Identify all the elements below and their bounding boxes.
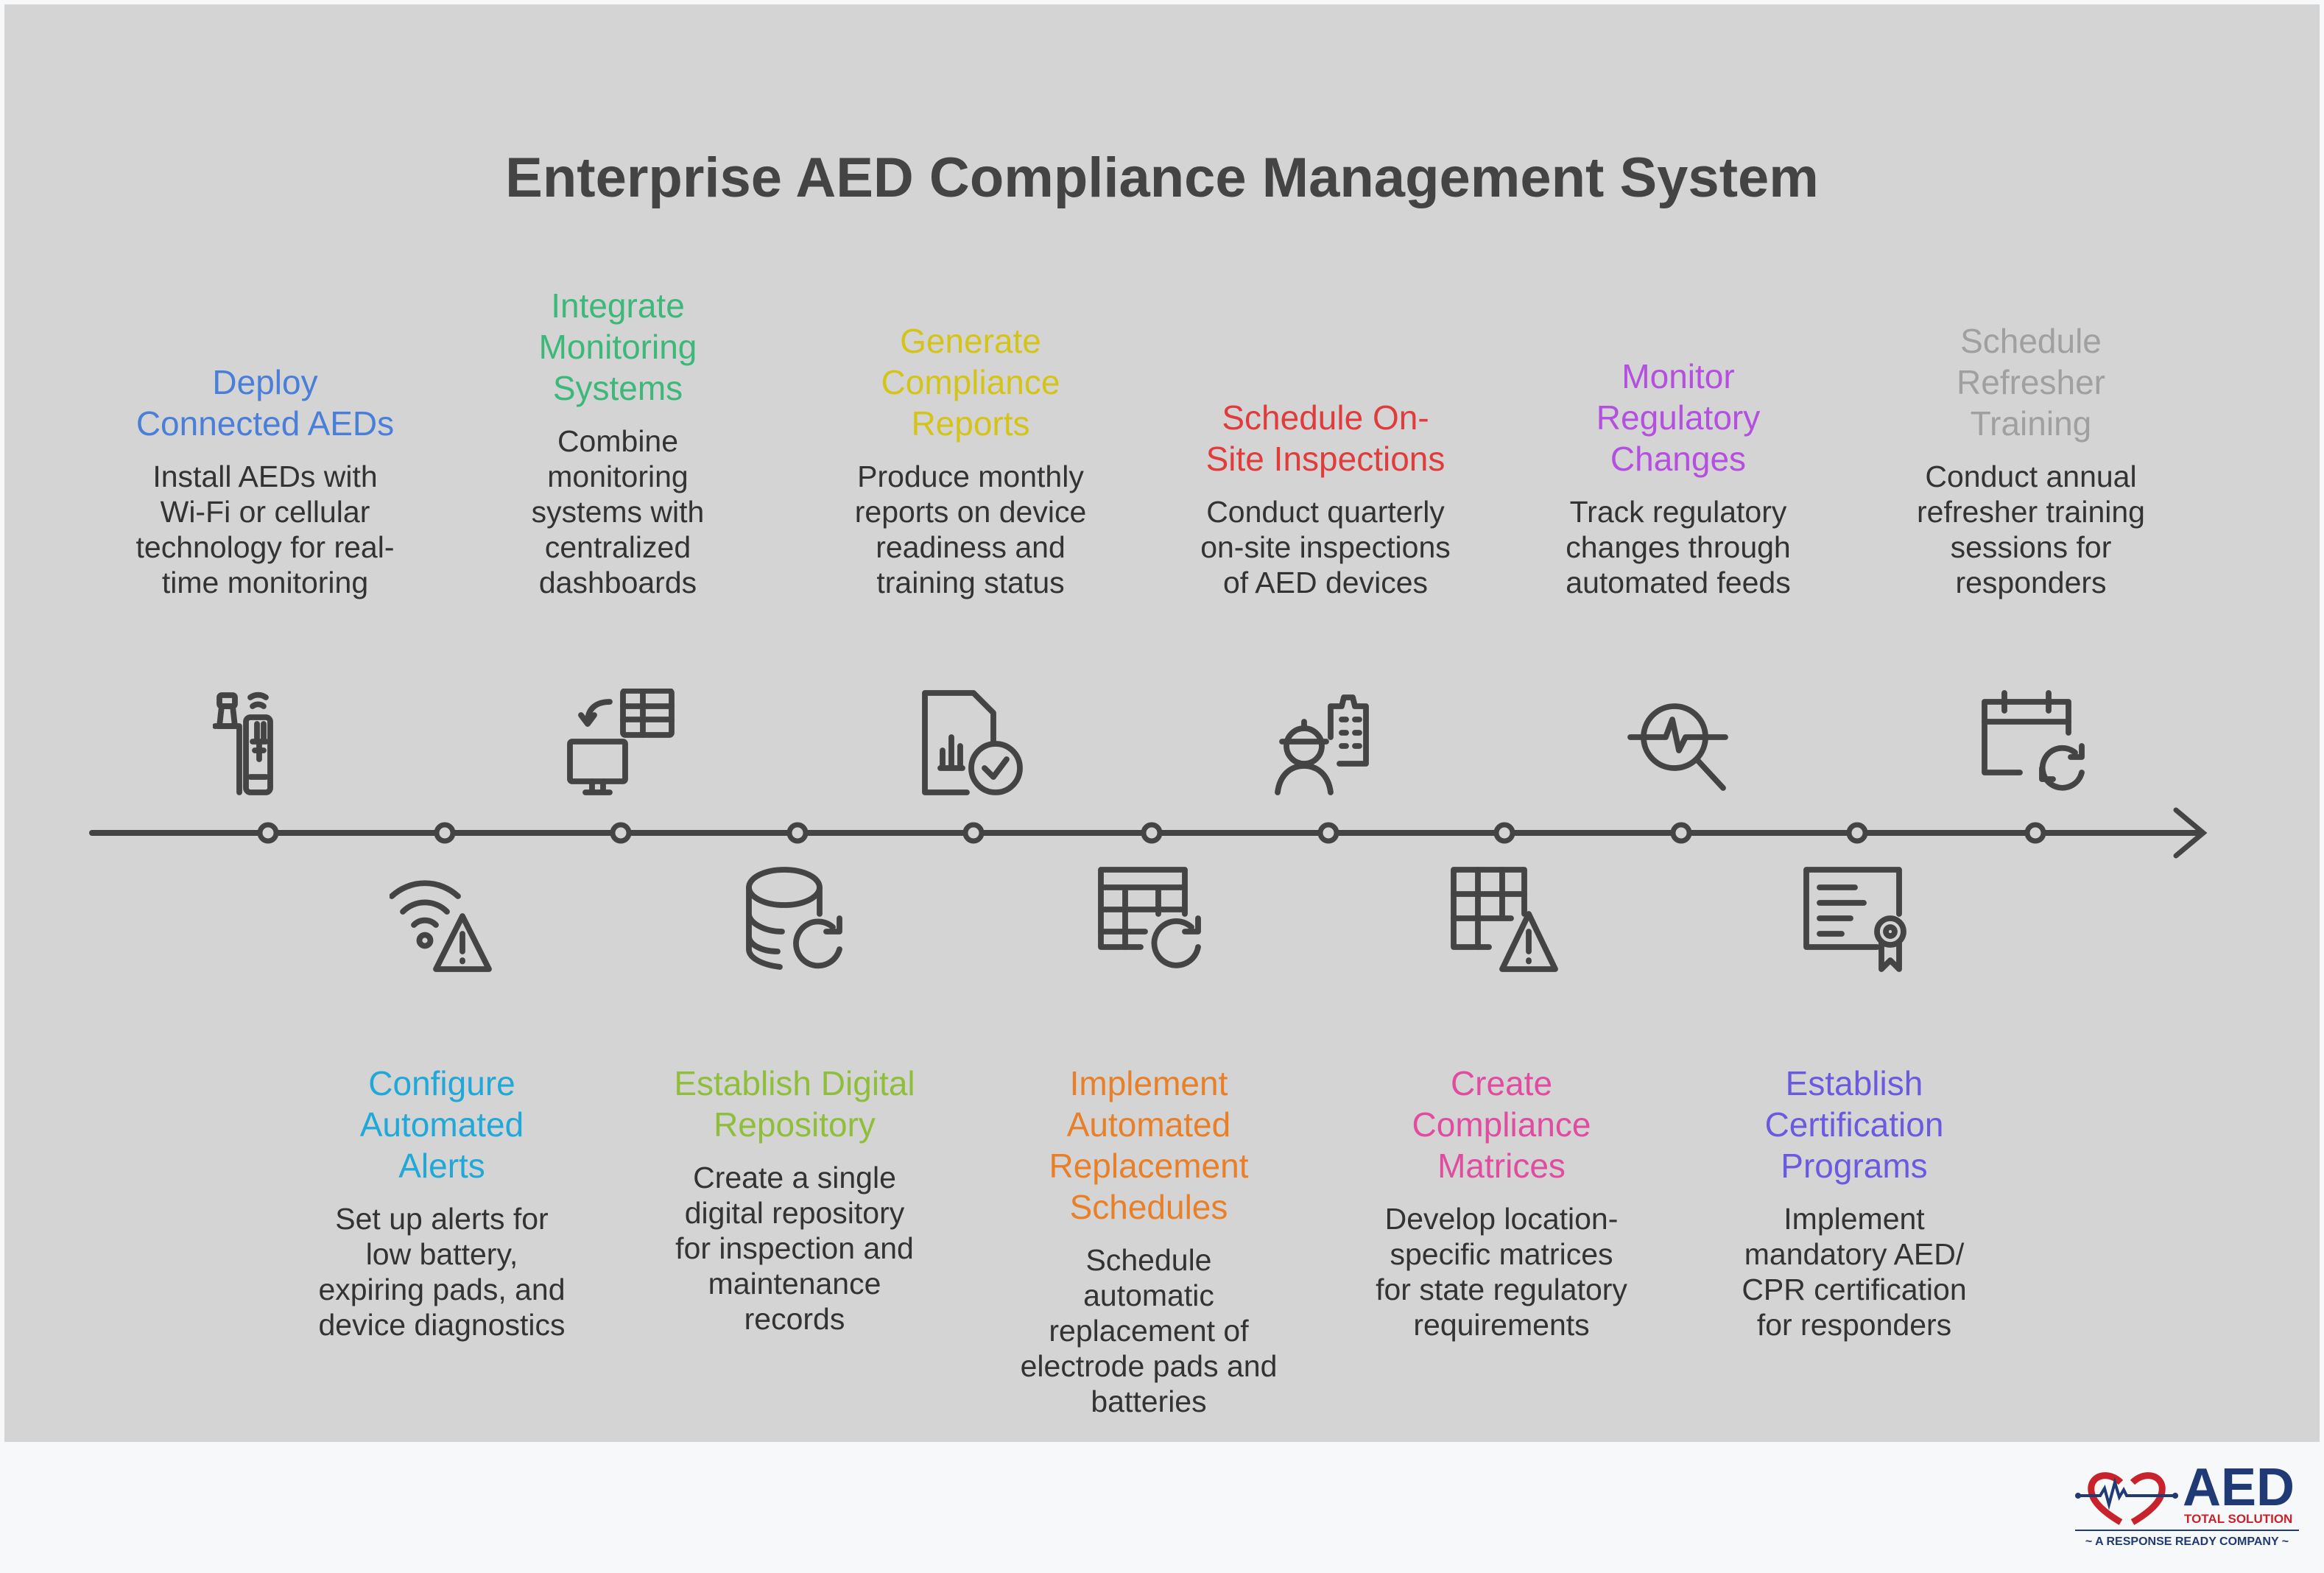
step 9: Monitor Regulatory Changes: Changes	[1610, 440, 1746, 478]
step 6: Implement Automated Replacement Schedules: Schedules	[1070, 1188, 1228, 1226]
step 8: Create Compliance Matrices	[1376, 1064, 1627, 1342]
step 1: Deploy Connected AEDs: Connected AEDs	[136, 404, 394, 443]
step 11: Schedule Refresher Training: Conduct annual	[1925, 460, 2137, 493]
step 1: Deploy Connected AEDs: Install AEDs with	[152, 460, 378, 493]
step 1: Deploy Connected AEDs: Wi-Fi or cellular	[161, 495, 370, 529]
step 8: Create Compliance Matrices: for state regulatory	[1376, 1273, 1627, 1306]
step 11: Schedule Refresher Training: refresher training	[1917, 495, 2145, 529]
step 4: Establish Digital Repository: records	[744, 1302, 845, 1336]
step 1: Deploy Connected AEDs	[136, 363, 394, 599]
step 3: Integrate Monitoring Systems: systems with	[532, 495, 704, 529]
icon: inspector clipboard	[1275, 694, 1369, 795]
step 5: Generate Compliance Reports: Generate	[900, 322, 1041, 360]
step 11: Schedule Refresher Training: sessions for	[1951, 530, 2111, 564]
step 7: Schedule On-Site Inspections	[1200, 398, 1451, 599]
icon: table refresh	[1098, 867, 1201, 968]
step 2: Configure Automated Alerts: Automated	[360, 1105, 524, 1144]
step 10: Establish Certification Programs: Implement	[1784, 1202, 1925, 1236]
step 9: Monitor Regulatory Changes: Monitor	[1621, 357, 1735, 395]
step 5: Generate Compliance Reports: readiness and	[876, 530, 1066, 564]
step 2: Configure Automated Alerts	[318, 1064, 566, 1342]
step 11: Schedule Refresher Training: responders	[1955, 566, 2107, 599]
step 11: Schedule Refresher Training: Training	[1971, 404, 2091, 443]
icon: monitor with grid	[567, 689, 675, 795]
step 8: Create Compliance Matrices: Create	[1451, 1064, 1552, 1102]
step 6: Implement Automated Replacement Schedules: Implement	[1070, 1064, 1228, 1102]
step 3: Integrate Monitoring Systems: centralized	[545, 530, 691, 564]
step 10: Establish Certification Programs: CPR certification	[1742, 1273, 1967, 1306]
step 2: Configure Automated Alerts: Alerts	[398, 1147, 485, 1185]
step 3: Integrate Monitoring Systems: Systems	[553, 369, 683, 407]
step 3: Integrate Monitoring Systems: monitoring	[547, 460, 689, 493]
step 5: Generate Compliance Reports	[855, 322, 1086, 599]
icon: database refresh	[746, 867, 842, 970]
step 11: Schedule Refresher Training	[1917, 322, 2145, 599]
step 9: Monitor Regulatory Changes: changes through	[1566, 530, 1791, 564]
icon: report check	[922, 690, 1023, 795]
step 9: Monitor Regulatory Changes: Regulatory	[1596, 398, 1760, 437]
step 8: Create Compliance Matrices: Matrices	[1437, 1147, 1566, 1185]
step 4: Establish Digital Repository: digital repository	[685, 1196, 904, 1230]
step 4: Establish Digital Repository	[674, 1064, 915, 1336]
step 2: Configure Automated Alerts: expiring pads, and	[318, 1273, 566, 1306]
timeline	[89, 807, 2208, 859]
step 7: Schedule On-Site Inspections: Conduct quarterly	[1206, 495, 1445, 529]
step 7: Schedule On-Site Inspections: of AED devices	[1223, 566, 1428, 599]
step 11: Schedule Refresher Training: Schedule	[1960, 322, 2102, 360]
step 8: Create Compliance Matrices: requirements	[1413, 1308, 1590, 1342]
step 1: Deploy Connected AEDs: time monitoring	[162, 566, 368, 599]
step 4: Establish Digital Repository: for inspection and	[675, 1231, 914, 1265]
step 4: Establish Digital Repository: Establish Digital	[674, 1064, 915, 1102]
step 4: Establish Digital Repository: Repository	[714, 1105, 876, 1144]
step 2: Configure Automated Alerts: device diagnostics	[318, 1308, 566, 1342]
step 7: Schedule On-Site Inspections: Schedule On-	[1222, 398, 1429, 437]
step 3: Integrate Monitoring Systems: Integrate	[551, 286, 685, 325]
step 9: Monitor Regulatory Changes: Track regulatory	[1570, 495, 1786, 529]
step 2: Configure Automated Alerts: low battery,	[366, 1237, 518, 1271]
step 3: Integrate Monitoring Systems: Monitoring	[539, 328, 697, 366]
step 10: Establish Certification Programs: mandatory AED/	[1744, 1237, 1964, 1271]
step 9: Monitor Regulatory Changes	[1566, 357, 1791, 599]
logo	[2075, 1458, 2299, 1548]
step 3: Integrate Monitoring Systems: Combine	[557, 424, 678, 458]
step 4: Establish Digital Repository: Create a single	[693, 1161, 896, 1194]
step 6: Implement Automated Replacement Schedules: electrode pads and	[1021, 1349, 1277, 1383]
icon: grid alert	[1451, 867, 1558, 972]
step 10: Establish Certification Programs: for responders	[1757, 1308, 1951, 1342]
step 6: Implement Automated Replacement Schedules	[1021, 1064, 1277, 1418]
step 9: Monitor Regulatory Changes: automated feeds	[1566, 566, 1791, 599]
step 3: Integrate Monitoring Systems	[532, 286, 704, 599]
step 10: Establish Certification Programs	[1742, 1064, 1967, 1342]
logo text: AED	[2183, 1458, 2295, 1517]
step 10: Establish Certification Programs: Establish	[1786, 1064, 1923, 1102]
step 1: Deploy Connected AEDs: technology for real-	[136, 530, 394, 564]
step 6: Implement Automated Replacement Schedules: Replacement	[1049, 1147, 1249, 1185]
step 10: Establish Certification Programs: Programs	[1781, 1147, 1928, 1185]
step 4: Establish Digital Repository: maintenance	[708, 1267, 881, 1301]
logo: ~ A RESPONSE READY COMPANY ~	[2085, 1535, 2289, 1548]
step 8: Create Compliance Matrices: Compliance	[1412, 1105, 1591, 1144]
step 5: Generate Compliance Reports: Produce monthly	[857, 460, 1084, 493]
step 5: Generate Compliance Reports: Reports	[911, 404, 1030, 443]
step 3: Integrate Monitoring Systems: dashboards	[539, 566, 697, 599]
icon: certificate	[1803, 867, 1906, 972]
step 1: Deploy Connected AEDs: Deploy	[212, 363, 318, 401]
step 5: Generate Compliance Reports: Compliance	[881, 363, 1060, 401]
icon: heart pulse	[2075, 1472, 2178, 1525]
step 7: Schedule On-Site Inspections: on-site inspections	[1200, 530, 1451, 564]
step 5: Generate Compliance Reports: reports on device	[855, 495, 1086, 529]
icon: wifi alert	[390, 880, 492, 972]
step 6: Implement Automated Replacement Schedules: replacement of	[1049, 1314, 1249, 1348]
step 6: Implement Automated Replacement Schedules: batteries	[1091, 1384, 1207, 1418]
step 5: Generate Compliance Reports: training status	[876, 566, 1065, 599]
step 6: Implement Automated Replacement Schedules: Automated	[1067, 1105, 1230, 1144]
step 2: Configure Automated Alerts: Set up alerts for	[335, 1202, 549, 1236]
step 10: Establish Certification Programs: Certification	[1765, 1105, 1943, 1144]
step 7: Schedule On-Site Inspections: Site Inspections	[1206, 440, 1445, 478]
step 6: Implement Automated Replacement Schedules: automatic	[1083, 1278, 1214, 1312]
logo: TOTAL SOLUTION	[2184, 1512, 2292, 1526]
title: Enterprise AED Compliance Management System	[505, 147, 1819, 209]
icon: calendar refresh	[1982, 690, 2085, 791]
step 8: Create Compliance Matrices: specific matrices	[1390, 1237, 1613, 1271]
icon: magnifier pulse	[1627, 703, 1728, 791]
step 11: Schedule Refresher Training: Refresher	[1957, 363, 2105, 401]
icon: AED phone	[213, 692, 273, 795]
step 2: Configure Automated Alerts: Configure	[368, 1064, 515, 1102]
step 8: Create Compliance Matrices: Develop location-	[1385, 1202, 1618, 1236]
step 6: Implement Automated Replacement Schedules: Schedule	[1086, 1243, 1211, 1277]
